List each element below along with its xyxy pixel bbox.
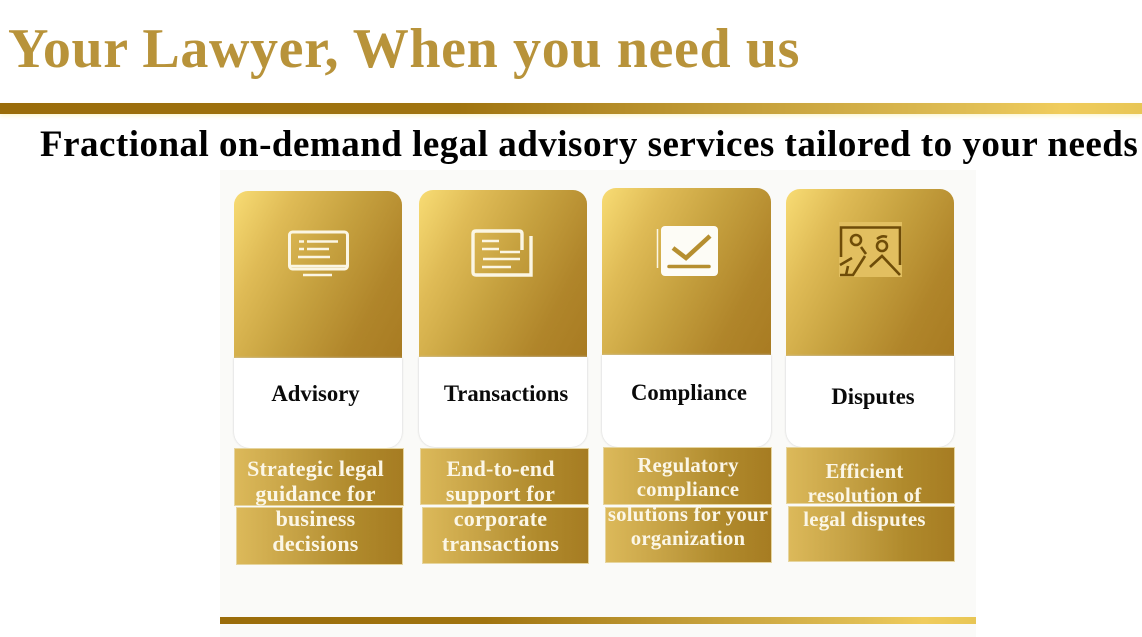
description text: solutions for your — [608, 503, 768, 526]
description lower box — [236, 507, 403, 565]
description text: Strategic legal — [247, 456, 384, 480]
description upper box — [420, 448, 589, 505]
description text: transactions — [442, 531, 559, 556]
description upper box — [786, 447, 955, 504]
card name panel — [234, 358, 402, 448]
description text: resolution of — [808, 484, 921, 507]
description text: business — [276, 506, 355, 531]
card name: Compliance — [631, 380, 747, 405]
description lower box — [605, 507, 772, 563]
description text — [247, 456, 384, 556]
card name panel — [419, 357, 587, 447]
subtitle: Fractional on-demand legal advisory services tailored to your needs — [40, 124, 1138, 165]
icon: newspaper — [471, 229, 533, 277]
card name: Disputes — [831, 384, 915, 409]
description upper box — [603, 447, 772, 505]
card name panel — [786, 356, 954, 447]
description lower box — [422, 507, 589, 564]
panel: Disputes card — [785, 189, 955, 562]
description text — [803, 460, 926, 531]
description text: compliance — [637, 478, 739, 501]
description text: Efficient — [825, 460, 904, 483]
description upper box — [234, 448, 404, 506]
card name panel — [602, 355, 771, 447]
description text: legal disputes — [803, 508, 926, 531]
description text: Regulatory — [637, 454, 739, 477]
bottom gold divider bar — [220, 617, 976, 624]
card name: Advisory — [271, 381, 360, 406]
description text — [608, 454, 768, 550]
card name: Transactions — [444, 381, 568, 406]
panel: Compliance card — [601, 188, 772, 563]
card gold header — [234, 191, 402, 358]
card gold header — [602, 188, 771, 355]
icon: checkmark document — [656, 226, 718, 276]
description text: End-to-end — [446, 456, 555, 480]
icon: image dispute symbol — [839, 222, 902, 277]
icon: monitor — [288, 230, 349, 276]
description text: organization — [631, 527, 745, 550]
panel: Transactions card — [418, 190, 589, 564]
panel: services background — [220, 170, 976, 637]
description text: support for — [446, 481, 555, 506]
card gold header — [786, 189, 954, 356]
title: Your Lawyer, When you need us — [8, 18, 800, 80]
description text — [442, 456, 559, 556]
description lower box — [788, 506, 955, 562]
description text: corporate — [454, 506, 547, 531]
description text: decisions — [272, 531, 359, 556]
panel: Advisory card — [233, 191, 404, 565]
card gold header — [419, 190, 587, 357]
description text: guidance for — [255, 481, 376, 506]
top gold divider bar — [0, 103, 1142, 114]
